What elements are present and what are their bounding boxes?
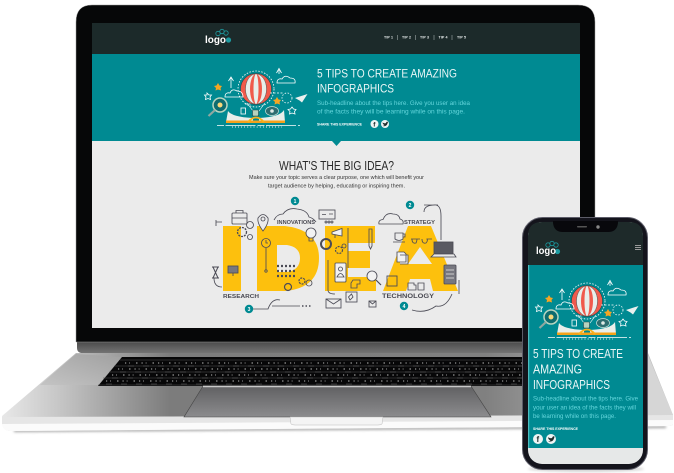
letter E [325,226,376,291]
number badge 1 [291,197,299,205]
icon: star card [346,292,357,302]
logo [205,29,231,46]
icon: gears [238,222,254,240]
magnifier [208,98,227,116]
phone headline [533,347,623,392]
hero subheadline: Sub-headline about the tips here. Give you user an idea [317,101,471,107]
icon: puzzle pieces [351,280,360,288]
navigation: TIP 4 [438,36,448,40]
hero headline: 5 TIPS TO CREATE AMAZING [317,68,457,80]
phone subheadline: Sub-headline about the tips here. Give [533,396,639,402]
icon: dot grid [277,266,297,276]
phone illustration [536,280,638,339]
letter A [383,226,458,291]
navigation [384,35,466,40]
navigation: TIP 5 [457,36,466,40]
icon: coffee cup [393,233,405,242]
social icons: f [373,122,376,128]
hero headline [317,68,457,96]
paper plane [295,94,308,102]
phone headline: INFOGRAPHICS [533,378,610,392]
icon: connector lines [214,205,459,311]
idea section background [92,141,580,328]
label strategy: STRATEGY [404,220,435,226]
icon: glasses [411,239,432,243]
clouds and arrows [204,68,296,114]
balloon [238,71,274,116]
phone logo [536,241,560,257]
label technology: TECHNOLOGY [382,293,435,300]
phone body [522,218,648,470]
icon: webcam [284,278,312,290]
navigation: TIP 3 [420,36,429,40]
hero headline: INFOGRAPHICS [317,84,394,96]
label research: RESEARCH [223,294,259,300]
share label: SHARE THIS EXPERIENCE [317,122,363,126]
icon: light bulb [306,228,316,241]
icon: gear cluster [336,244,346,254]
phone logo: logo [536,246,556,257]
idea word art [212,197,459,313]
section intro: Make sure your topic serves a clear purpose, one which will benefit your [249,175,424,181]
hamburger menu [635,246,641,250]
icon: chat card [319,210,335,223]
phone social icons [533,434,556,444]
section intro: target audience by helping, educating or inspiring them. [268,184,405,190]
letter I [223,226,241,291]
gold stars [214,83,281,104]
icon: tablet [444,265,456,284]
icon: target ring [321,239,331,249]
number badge 4: 4 [403,304,406,310]
phone subheadline [533,396,639,420]
section heading: WHAT'S THE BIG IDEA? [279,159,394,173]
phone notch [553,221,618,232]
thumb notch [290,417,383,425]
open book [217,110,300,127]
phone subheadline: your user an idea of the facts they will [533,406,636,412]
letter D [257,226,319,291]
logo: logo [205,35,226,46]
social icons [370,120,389,128]
hero pointer [332,141,341,146]
phone [522,218,648,472]
icon: laptop [431,242,456,257]
line icons [212,205,459,311]
icon: mini circles [302,305,312,307]
laptop hinge [77,341,595,353]
site header [92,23,580,54]
phone share label: SHARE THIS EXPERIENCE [533,427,579,431]
icon: magnifier [367,271,381,285]
number badge 3: 3 [248,307,251,313]
navigation: TIP 1 [384,36,393,40]
phone headline: AMAZING [533,362,582,376]
section intro [249,175,424,190]
icon: map pin [258,214,268,231]
laptop screen [92,23,580,328]
icon: sticky note [387,276,397,286]
number badge 3 [245,305,253,313]
icon: pencil [369,229,372,249]
laptop base [2,353,673,432]
icon: clock [262,238,270,272]
icon: hourglass [212,267,219,278]
hero subheadline [317,101,471,116]
phone shadow [528,466,644,472]
phone headline: 5 TIPS TO CREATE [533,347,623,361]
icon: briefcase [232,210,247,224]
number badge 2: 2 [409,203,412,209]
laptop lid [76,5,595,342]
phone screen [528,222,643,464]
label innovations: INNOVATIONS [277,220,315,226]
keyboard keys [98,360,560,385]
icon: cloud innovations [274,209,316,222]
number badge 1: 1 [294,199,297,205]
number badge 4 [400,302,408,310]
icon: envelopes [326,299,376,308]
icon: documents [397,252,408,264]
eye badge [266,106,278,116]
number badge 2 [406,201,414,209]
icon: cloud strategy [379,214,403,224]
illustration: balloon over book [204,68,308,127]
icon: phone profile [335,263,346,282]
icon: megaphone [332,228,342,238]
phone subheadline: be learning while on this page. [533,414,616,420]
phone social icons: f [536,435,540,444]
navigation: TIP 2 [402,36,411,40]
hero subheadline: of the facts they will be learning while on this page. [317,110,465,116]
icon: puzzle [408,283,424,290]
hero band [92,54,580,141]
trackpad [184,386,491,417]
icon: presentation board [228,266,238,276]
